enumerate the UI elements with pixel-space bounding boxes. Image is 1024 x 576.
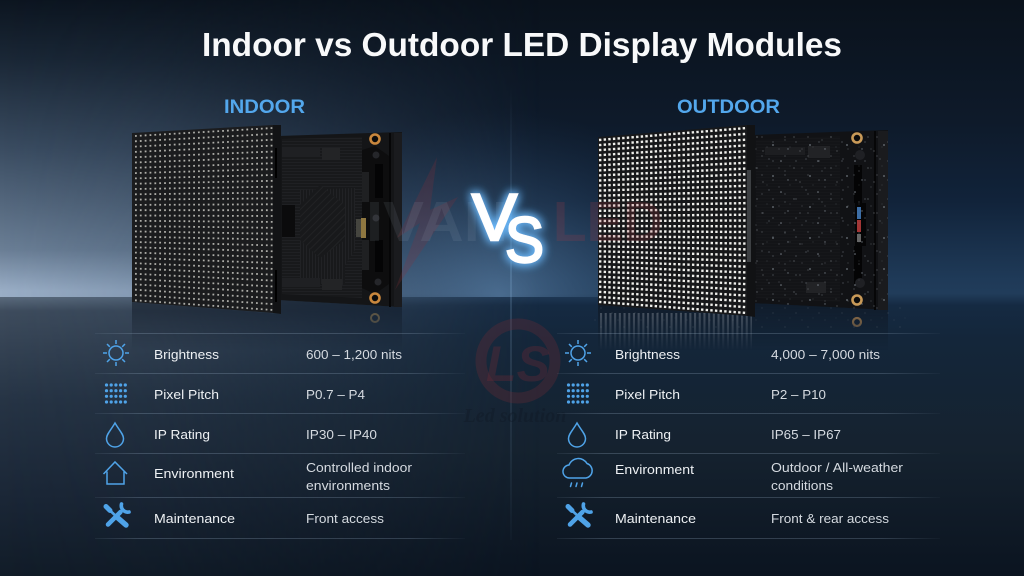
brass ring bottom [852,296,862,304]
icon: house [104,462,127,484]
module front LED face [598,125,755,317]
module front LED face [132,125,281,314]
watermark: LS logo [463,324,566,427]
indoor floor reflection [132,300,402,336]
label: maintenance: Maintenance [615,511,696,526]
label: brightness: Brightness [154,347,220,362]
value: indoor brightness: 600 – 1,200 nits [306,347,403,362]
value: outdoor IP rating: IP65 – IP67 [771,427,841,442]
centre divider [510,85,512,540]
value: indoor environment [306,460,413,493]
label: environment: Environment [154,466,234,481]
value: indoor environment: environments [306,478,391,493]
icon: pixel pitch grid [105,383,127,404]
icon: tools [568,504,591,525]
module rear panel [752,130,888,310]
watermark: IVANLED: LED [553,190,663,254]
icon: brightness sun [103,340,129,366]
label: IP rating: IP Rating [154,427,210,442]
wet floor droplets [590,303,910,330]
brass ring top [852,134,862,142]
icon: water drop [568,423,586,447]
indoor LED module [132,125,402,314]
panel: outdoor specs table [557,333,940,539]
VS badge: V [472,180,517,254]
icon: rain cloud [563,459,592,486]
value: outdoor environment: Outdoor / All-weather [771,460,904,475]
VS badge: S [505,204,544,276]
value: indoor environment: Controlled indoor [306,460,413,475]
value: indoor maintenance: Front access [306,511,385,526]
watermark: LS logo: Led solution [463,405,566,427]
outdoor floor reflection [598,303,888,343]
label: maintenance: Maintenance [154,511,235,526]
brass ring bottom [370,294,380,302]
module rear panel [278,132,402,307]
value: outdoor environment [771,460,904,493]
label: brightness: Brightness [615,347,681,362]
title: Indoor vs Outdoor LED Display Modules [202,27,842,64]
icon: brightness sun [565,340,591,366]
label: pixel pitch: Pixel Pitch [615,387,680,402]
value: outdoor maintenance: Front & rear access [771,511,890,526]
value: outdoor pixel pitch: P2 – P10 [771,387,826,402]
value: indoor pixel pitch: P0.7 – P4 [306,387,365,402]
watermark: IVANLED: IVAN [366,190,508,254]
icon: tools [106,504,129,525]
watermark: IVANLED [366,157,663,290]
heading: outdoor: OUTDOOR [677,96,780,118]
icon: pixel pitch grid [567,383,589,404]
icon: water drop [106,423,124,447]
value: indoor IP rating: IP30 – IP40 [306,427,377,442]
panel: indoor specs table [95,333,465,539]
value: outdoor brightness: 4,000 – 7,000 nits [771,347,881,362]
label: environment: Environment [615,462,694,477]
watermark: LS logo: LS [486,336,550,392]
brass ring top [370,134,380,144]
label: pixel pitch: Pixel Pitch [154,387,219,402]
value: outdoor environment: conditions [771,478,834,493]
label: IP rating: IP Rating [615,427,671,442]
VS badge [472,180,544,276]
heading: indoor: INDOOR [224,96,305,118]
outdoor LED module [598,125,888,317]
